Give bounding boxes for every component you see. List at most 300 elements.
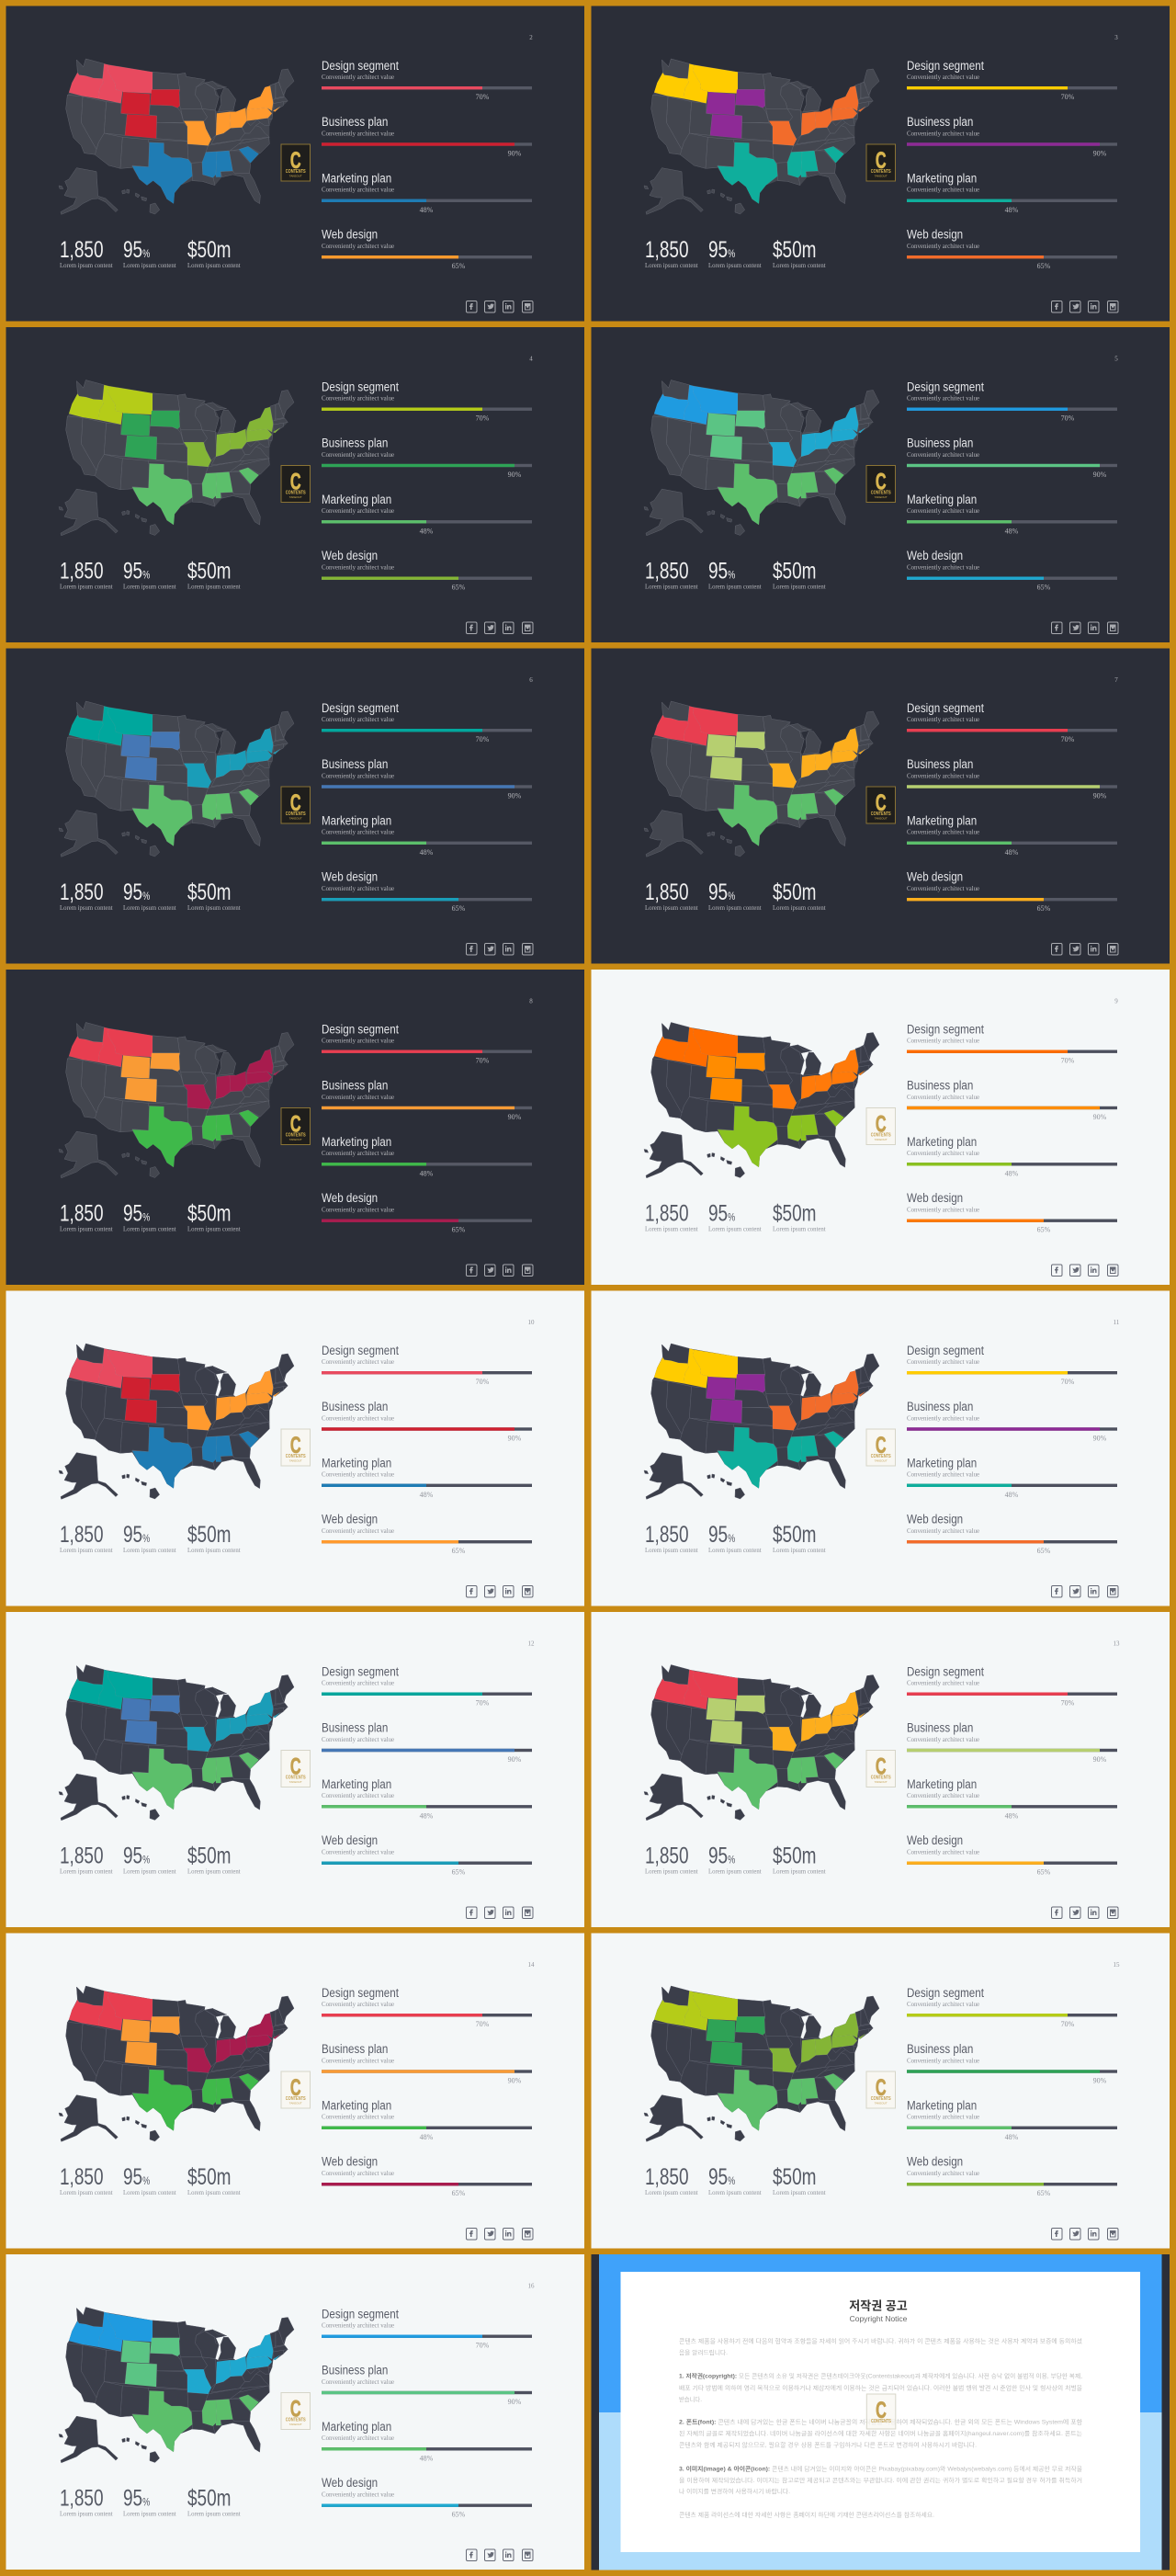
stat: 1,850: Lorem ipsum content [645, 1225, 698, 1233]
progress bars [322, 1985, 532, 2197]
notice body text: 배포 기타 방법에 의하여 영리 목적으로 이용하거나 제삼자에게 이용하는 것은 금지되어 있습니다. 이러한 불법 행위 발견 시 준엄한 민사 및 형사상의 처벌을 [679, 2384, 1082, 2391]
stat: 95%: Lorem ipsum content [708, 262, 762, 269]
bar: Marketing plan: 48% [420, 1169, 434, 1178]
bar: Business plan [322, 2041, 532, 2084]
bar: Business plan: Business plan [322, 435, 388, 450]
bar: Marketing plan: 48% [1005, 1812, 1019, 1820]
bar: Marketing plan [322, 1455, 532, 1499]
logo badge: TAKEOUT [289, 2101, 302, 2105]
bar: Design segment [322, 1021, 532, 1064]
logo badge: C [876, 470, 887, 494]
bar: Marketing plan: 48% [1005, 1491, 1019, 1499]
bar: Web design [322, 1511, 532, 1555]
bar: Marketing plan [322, 2419, 532, 2463]
logo badge: TAKEOUT [875, 816, 888, 820]
logo badge [281, 144, 311, 181]
stat: 95%: Lorem ipsum content [123, 1547, 176, 1554]
bar: Design segment [322, 379, 532, 423]
bar: Web design: 65% [452, 1547, 466, 1555]
logo badge [281, 1108, 311, 1145]
panel: slide 10 light red [6, 1290, 584, 1606]
stat: 1,850: Lorem ipsum content [645, 262, 698, 269]
bar: Design segment: Design segment [322, 700, 399, 715]
bar: Web design: Conveniently architect value [322, 885, 394, 892]
bar: Design segment: 70% [476, 1378, 490, 1386]
bar: Business plan: 90% [1093, 1113, 1107, 1121]
bar: Design segment: Design segment [907, 379, 984, 394]
bar: Design segment: 70% [1061, 93, 1075, 101]
stat: 1,850: 1,850 [60, 558, 104, 584]
panel: slide 15 light lime [592, 1934, 1170, 2248]
page number: 16 [527, 2283, 535, 2290]
bar: Design segment [907, 1663, 1117, 1708]
bar: Design segment: Conveniently architect value [907, 716, 979, 723]
stat: 95%: Lorem ipsum content [123, 262, 176, 269]
progress bars [322, 1343, 532, 1555]
panel: slide 6 dark teal [6, 649, 584, 963]
US map [59, 701, 294, 857]
stat: $50m: $50m [187, 879, 232, 905]
bar: Marketing plan [322, 170, 532, 214]
progress bars [322, 2306, 532, 2518]
stat: $50m: $50m [187, 1200, 232, 1226]
stat: 1,850 [60, 1521, 113, 1554]
logo badge: C [290, 1112, 301, 1137]
stat: 95%: Lorem ipsum content [708, 1225, 762, 1233]
bar: Web design: 65% [452, 262, 466, 270]
notice body text: 콘텐츠 제품을 사용하기 전에 다음의 협약과 조항들을 자세히 읽어 주시기 바랍니다. 귀하가 이 콘텐츠 제품을 사용하는 것은 사용자 계약과 보증에 동의하셨 [679, 2336, 1082, 2345]
bar: Business plan: 90% [508, 792, 522, 800]
logo badge [866, 1750, 895, 1787]
US map [59, 1664, 294, 1821]
logo badge: CONTENTS [871, 490, 891, 495]
stat: $50m: Lorem ipsum content [187, 583, 241, 591]
panel background [592, 1612, 1170, 1927]
stat: 95% [708, 2163, 762, 2196]
logo badge [866, 1108, 895, 1145]
bar: Design segment: Conveniently architect value [322, 716, 394, 723]
notice body text: 1. 저작권(copyright): 모든 콘텐츠의 소유 및 저작권은 콘텐츠테이크아웃(Contentstakeout)과 제작자에게 있습니다. 사전 승낙 없이 불법적 이용, 부당한 복제, [679, 2371, 1082, 2380]
bar: Web design [907, 1511, 1117, 1555]
panel background [592, 327, 1170, 642]
stat: 1,850: Lorem ipsum content [645, 2189, 698, 2196]
bar: Web design [907, 1190, 1117, 1233]
bar: Web design: 65% [1037, 904, 1051, 913]
social icons [1051, 301, 1118, 312]
stat: $50m: $50m [187, 558, 232, 584]
bar: Marketing plan: Marketing plan [907, 1455, 977, 1470]
logo badge: CONTENTS [871, 1454, 891, 1458]
stat: 1,850: Lorem ipsum content [645, 1867, 698, 1876]
bar: Web design: 65% [1037, 583, 1051, 592]
bar: Design segment: Design segment [322, 1985, 399, 2000]
bar: Marketing plan [322, 2097, 532, 2141]
stat: 95% [708, 236, 762, 269]
bar: Design segment [322, 700, 532, 743]
bar: Marketing plan [322, 812, 532, 857]
bar: Web design: Web design [322, 226, 378, 242]
bar: Design segment: 70% [476, 2342, 490, 2349]
stat: 1,850: Lorem ipsum content [60, 583, 113, 591]
stat: 95% [708, 1521, 762, 1554]
logo badge: CONTENTS [286, 1132, 306, 1138]
social icons [467, 2228, 533, 2240]
progress bars [907, 1663, 1117, 1877]
progress bars [907, 379, 1117, 592]
stat: 95%: 95% [708, 2163, 736, 2190]
logo badge [866, 144, 895, 181]
bar: Design segment: 70% [1061, 735, 1075, 743]
stat: $50m [773, 879, 826, 912]
bar: Design segment: Design segment [907, 58, 984, 73]
bar: Web design: 65% [452, 583, 466, 592]
stat: 1,850: 1,850 [645, 879, 689, 905]
US map [644, 1986, 879, 2141]
stat: $50m [773, 1843, 826, 1876]
logo badge [281, 465, 311, 502]
stat: $50m: Lorem ipsum content [187, 2189, 241, 2196]
bar: Web design: Conveniently architect value [907, 243, 979, 250]
bar: Business plan: Conveniently architect value [907, 451, 979, 459]
logo badge: TAKEOUT [875, 495, 888, 499]
bar: Web design: Web design [907, 1190, 963, 1205]
stat: 95%: Lorem ipsum content [708, 2189, 762, 2196]
stat: 1,850 [60, 1200, 113, 1233]
stat: 1,850: 1,850 [60, 879, 104, 905]
logo badge: CONTENTS [286, 490, 306, 495]
social icons [467, 1907, 533, 1919]
bar: Design segment: 70% [476, 1057, 490, 1064]
page number: 12 [527, 1640, 535, 1647]
bar: Design segment: 70% [476, 735, 490, 743]
stat: 95%: 95% [708, 1843, 736, 1868]
stat: 95% [708, 879, 762, 912]
logo badge: C [290, 791, 301, 816]
bar: Web design: 65% [1037, 2189, 1051, 2197]
logo badge: CONTENTS [871, 169, 891, 174]
bar: Marketing plan: 48% [420, 528, 434, 535]
bar: Design segment: Design segment [907, 1343, 984, 1357]
logo badge: TAKEOUT [289, 1780, 302, 1784]
stat: $50m: $50m [187, 1843, 232, 1868]
bar: Web design: Web design [907, 2153, 963, 2169]
stat: 95%: Lorem ipsum content [708, 904, 762, 912]
bar: Marketing plan: 48% [420, 1812, 434, 1820]
bar: Marketing plan: Conveniently architect value [322, 828, 394, 836]
stat: 1,850 [60, 2485, 113, 2518]
bar: Marketing plan [907, 1455, 1117, 1499]
logo badge [866, 2071, 895, 2108]
bar: Marketing plan: Marketing plan [907, 2097, 977, 2113]
stat: 95%: Lorem ipsum content [123, 1225, 176, 1233]
bar: Design segment [907, 1985, 1117, 2028]
bar: Design segment: Design segment [322, 2306, 399, 2321]
page number: 9 [1114, 998, 1118, 1005]
bar: Business plan [322, 435, 532, 479]
US map [644, 380, 879, 536]
logo badge [281, 2071, 311, 2108]
notice body text: 나 이미지를 변경하여 사용하시기 바랍니다. [679, 2487, 790, 2495]
stat: 95%: 95% [123, 558, 151, 584]
logo badge: TAKEOUT [289, 175, 302, 178]
bar: Marketing plan: 48% [1005, 848, 1019, 857]
bar: Marketing plan: Conveniently architect value [907, 828, 979, 836]
bar: Business plan: Business plan [322, 1399, 388, 1413]
bar: Business plan [322, 2362, 532, 2406]
bar: Design segment: Conveniently architect value [907, 1679, 979, 1687]
bar: Business plan: Business plan [322, 2362, 388, 2377]
stat: 95% [123, 236, 176, 269]
panel: slide 11 light yellow [592, 1290, 1170, 1606]
logo badge: TAKEOUT [875, 175, 888, 178]
bar: Marketing plan: 48% [420, 2454, 434, 2463]
stat: 95%: Lorem ipsum content [708, 1867, 762, 1876]
panel background [6, 1934, 584, 2248]
bar: Marketing plan: Conveniently architect value [907, 2113, 979, 2121]
bar: Design segment: Design segment [322, 1343, 399, 1357]
bar: Web design [322, 548, 532, 592]
bar: Marketing plan [907, 812, 1117, 857]
notice body text: 콘텐츠와 함께 제공되지 않으므로, 필요할 경우 상용 폰트를 구입하거나 다른 폰트로 변경하여 사용하시기 바랍니다. [679, 2441, 977, 2448]
bar: Business plan: 90% [508, 2398, 522, 2406]
progress bars [322, 1021, 532, 1233]
bar: Design segment [322, 1985, 532, 2028]
logo badge: C [876, 2076, 887, 2101]
panel: slide 13 light coral [592, 1612, 1170, 1927]
bar: Business plan: Business plan [322, 114, 388, 129]
bar: Marketing plan: Marketing plan [322, 812, 391, 828]
bar: Marketing plan: 48% [1005, 206, 1019, 214]
bar: Business plan [907, 1077, 1117, 1121]
US map [644, 1344, 879, 1499]
panel: slide 3 dark yellow [592, 6, 1170, 322]
bar: Web design: Web design [907, 548, 963, 562]
social icons [467, 301, 533, 312]
stat: $50m: Lorem ipsum content [773, 2189, 826, 2196]
page number: 5 [1114, 355, 1118, 362]
bar: Web design: 65% [452, 2189, 466, 2197]
social icons [467, 1586, 533, 1597]
US map [59, 59, 294, 214]
bar: Marketing plan [907, 492, 1117, 535]
bar: Design segment: Design segment [322, 1663, 399, 1679]
logo badge [866, 2394, 896, 2429]
bar: Marketing plan: 48% [420, 1491, 434, 1499]
bar: Design segment [322, 1343, 532, 1386]
page number: 7 [1114, 676, 1118, 684]
bar: Marketing plan: Marketing plan [907, 170, 977, 186]
logo badge: CONTENTS [286, 811, 306, 816]
stat: $50m [773, 558, 826, 591]
stat: 95%: Lorem ipsum content [123, 583, 176, 591]
panel background [6, 649, 584, 963]
bar: Marketing plan: Conveniently architect value [322, 186, 394, 194]
bar: Marketing plan: Conveniently architect value [907, 186, 979, 194]
bar: Web design: 65% [1037, 262, 1051, 270]
bar: Business plan [907, 435, 1117, 479]
stat: 1,850: 1,850 [645, 1200, 689, 1226]
logo badge: CONTENTS [871, 811, 891, 816]
bar: Design segment: 70% [476, 1698, 490, 1708]
white notice card [621, 2272, 1140, 2552]
bar: Web design: Web design [322, 1833, 378, 1847]
stat: 1,850: Lorem ipsum content [60, 1547, 113, 1554]
stat: 95% [123, 558, 176, 591]
bar: Business plan: 90% [1093, 1755, 1107, 1764]
bar: Web design: Conveniently architect value [907, 563, 979, 572]
stat: 95% [123, 1200, 176, 1233]
bar: Business plan: Conveniently architect value [322, 772, 394, 780]
panel background [592, 1934, 1170, 2248]
bar: Marketing plan: Marketing plan [322, 1134, 391, 1149]
bar: Design segment: 70% [476, 93, 490, 101]
panel: slide 14 light maroon [6, 1934, 584, 2248]
stat: 95% [123, 2163, 176, 2196]
bar: Business plan: Conveniently architect value [907, 1736, 979, 1743]
bar: Business plan: 90% [1093, 1434, 1107, 1443]
bar: Business plan [907, 114, 1117, 158]
bar: Design segment: Design segment [907, 700, 984, 715]
bar: Design segment: Conveniently architect value [907, 1358, 979, 1366]
stat: $50m: Lorem ipsum content [773, 262, 826, 269]
bar: Design segment: Design segment [322, 1021, 399, 1037]
stat: 1,850 [645, 236, 698, 269]
bar: Marketing plan: Marketing plan [907, 812, 977, 828]
stat: 1,850 [645, 1843, 698, 1876]
bar: Marketing plan: 48% [1005, 1169, 1019, 1178]
stat: 95%: 95% [123, 2485, 151, 2511]
bar: Web design [322, 868, 532, 913]
bar: Design segment: Conveniently architect value [907, 2001, 979, 2008]
logo badge: C [290, 2076, 301, 2101]
stat: 1,850: 1,850 [60, 2485, 104, 2511]
bar: Business plan: 90% [508, 149, 522, 158]
stat: 95%: Lorem ipsum content [123, 904, 176, 912]
stat: $50m [187, 2163, 241, 2196]
bar: Business plan: Conveniently architect value [907, 772, 979, 780]
bar: Business plan [322, 756, 532, 800]
social icons [1051, 943, 1118, 955]
progress bars [322, 700, 532, 913]
bar: Web design: 65% [1037, 1547, 1051, 1555]
stat: 1,850: 1,850 [645, 1843, 689, 1868]
stat: 1,850: 1,850 [60, 236, 104, 263]
stat: $50m: $50m [773, 558, 817, 584]
bar: Business plan: Conveniently architect value [907, 2057, 979, 2065]
bar: Marketing plan: Conveniently architect value [907, 507, 979, 515]
US map [59, 380, 294, 536]
panel: slide 8 dark maroon [6, 970, 584, 1285]
bar: Web design: Conveniently architect value [907, 1848, 979, 1856]
logo badge: TAKEOUT [875, 1138, 888, 1141]
stat: $50m: Lorem ipsum content [773, 583, 826, 591]
bar: Business plan: 90% [508, 2077, 522, 2084]
US map [644, 701, 879, 857]
bar: Marketing plan: Marketing plan [322, 492, 391, 506]
bar: Design segment: Conveniently architect value [322, 1358, 394, 1366]
progress bars [907, 58, 1117, 270]
bar: Marketing plan: Marketing plan [907, 1134, 977, 1149]
panel background [6, 6, 584, 322]
stat: $50m: Lorem ipsum content [773, 904, 826, 912]
bar: Web design: Conveniently architect value [322, 2170, 394, 2177]
bar: Web design [322, 1190, 532, 1233]
bar: Business plan: 90% [1093, 149, 1107, 158]
stat: 1,850: 1,850 [60, 1843, 104, 1868]
social icons [467, 2549, 533, 2560]
logo badge: C [290, 2397, 301, 2422]
bar: Marketing plan [322, 1776, 532, 1820]
bar: Web design [907, 548, 1117, 592]
notice body text: 3. 이미지(image) & 아이콘(icon): 콘텐츠 내에 담겨있는 이미지와 아이콘은 Pixabay(pixabay.com)와 Webalys(webalys.com) 등에서 제공한 무료 저작물 [679, 2465, 1082, 2472]
stat: 95% [123, 2485, 176, 2518]
bar: Business plan [322, 1399, 532, 1443]
stat: $50m: $50m [773, 1521, 817, 1548]
bar: Business plan: 90% [508, 471, 522, 479]
bar: Business plan: Business plan [907, 435, 973, 450]
bar: Design segment: 70% [1061, 1698, 1075, 1708]
bar: Marketing plan [907, 170, 1117, 214]
bar: Web design: 65% [1037, 1867, 1051, 1877]
stat: 1,850 [60, 879, 113, 912]
bar: Business plan: Business plan [322, 2041, 388, 2056]
logo badge: TAKEOUT [875, 1459, 888, 1463]
bar: Marketing plan: Conveniently architect value [907, 1792, 979, 1799]
bar: Web design: Conveniently architect value [322, 243, 394, 250]
page number: 6 [529, 676, 533, 684]
logo badge: TAKEOUT [289, 495, 302, 499]
logo badge: TAKEOUT [289, 1138, 302, 1141]
stat: 95% [123, 1521, 176, 1554]
bar: Business plan: Conveniently architect value [322, 1736, 394, 1743]
stat: $50m: Lorem ipsum content [773, 1867, 826, 1876]
bar: Marketing plan: Marketing plan [907, 1776, 977, 1791]
bar: Design segment: Conveniently architect value [322, 394, 394, 403]
bar: Web design: Web design [322, 1511, 378, 1526]
bar: Marketing plan: Conveniently architect value [322, 1470, 394, 1479]
stat: 95%: 95% [123, 2163, 151, 2190]
stat: 95% [123, 1843, 176, 1876]
panel: slide 5 dark blue [592, 327, 1170, 642]
stat: 95% [708, 1200, 762, 1233]
stat: 1,850 [60, 1843, 113, 1876]
panel: slide 4 dark lime [6, 327, 584, 642]
bar: Web design [907, 868, 1117, 913]
progress bars [322, 58, 532, 270]
bar: Web design [322, 2475, 532, 2518]
stat: 95%: Lorem ipsum content [708, 583, 762, 591]
bar: Design segment: Conveniently architect value [907, 1037, 979, 1045]
panel background [6, 2254, 584, 2570]
social icons [467, 622, 533, 634]
logo badge [281, 1750, 311, 1787]
stat: 1,850: Lorem ipsum content [60, 2189, 113, 2196]
bar: Marketing plan [907, 2097, 1117, 2141]
bar: Design segment: Design segment [322, 379, 399, 394]
bar: Business plan: 90% [508, 1434, 522, 1443]
stat: $50m: $50m [773, 2163, 817, 2190]
stat: $50m [773, 1521, 826, 1554]
bar: Business plan: 90% [1093, 792, 1107, 800]
bar: Web design: Conveniently architect value [322, 563, 394, 572]
stat: 1,850 [645, 879, 698, 912]
US map [59, 2307, 294, 2463]
stat: $50m: $50m [773, 1200, 817, 1226]
bar: Business plan: Business plan [907, 114, 973, 129]
panel: slide 16 light blue [6, 2254, 584, 2570]
bar: Web design: Web design [322, 1190, 378, 1205]
bar: Business plan [907, 2041, 1117, 2084]
